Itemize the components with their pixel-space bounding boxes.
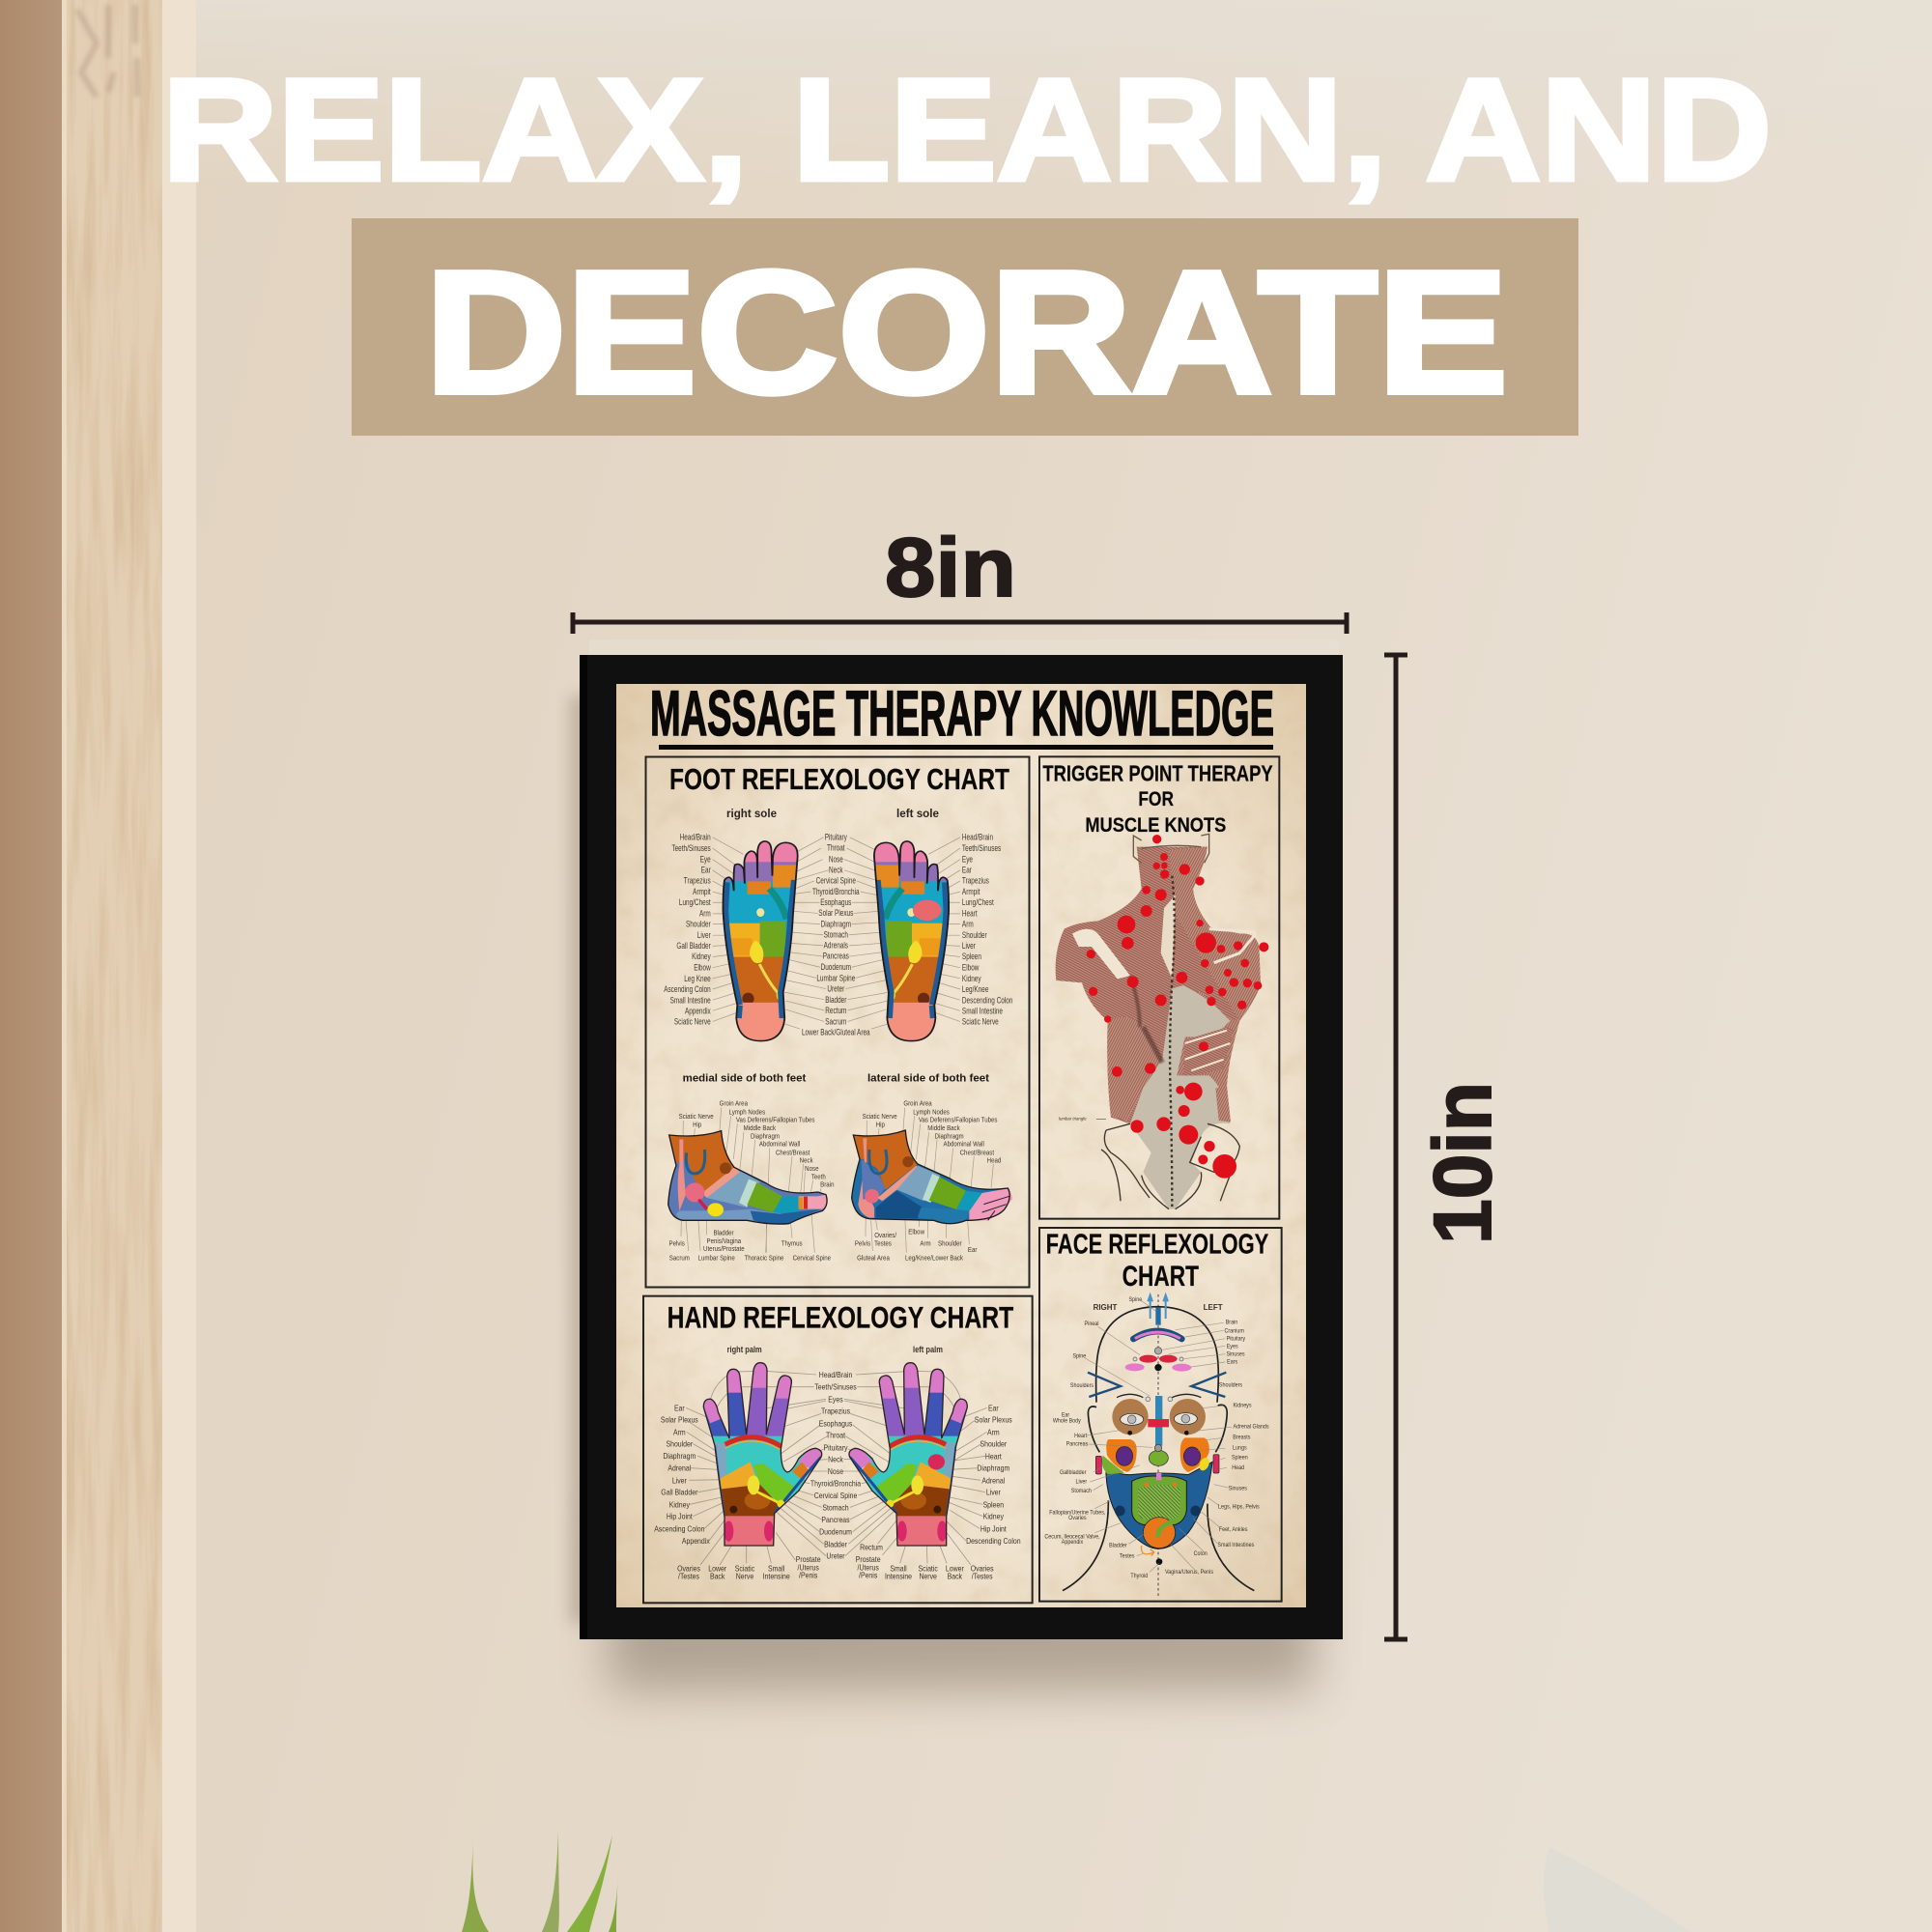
side-foot labels: Thoracic Spine [745,1255,784,1263]
width dimension: 8in: 8in [885,522,1016,614]
hand labels left column: Gall Bladder [661,1488,698,1497]
face labels: Appendix [1062,1540,1083,1546]
right column labels: Arm [962,920,974,929]
left column labels: Ascending Colon [664,984,711,994]
hand labels bottom row: Prostate [796,1554,821,1564]
side-foot labels: Ear [968,1246,978,1254]
hand labels centre column: Bladder [824,1540,847,1549]
face labels: Sinuses [1229,1486,1247,1492]
face labels: Head [1232,1465,1244,1471]
side-foot labels: Lymph Nodes [913,1109,950,1117]
face labels: Lungs [1233,1445,1247,1452]
face labels: Sinuses [1226,1351,1245,1357]
face leader lines [1085,1301,1232,1572]
side-foot labels: Neck [800,1157,813,1165]
side-foot labels: Elbow [908,1229,925,1236]
lateral heading: lateral side of both feet [867,1072,989,1084]
right column labels: Descending Colon [962,995,1012,1006]
panel: foot reflexology [645,757,1030,1287]
side-foot labels: Sacrum [669,1255,690,1263]
hand labels bottom row: /Testes [678,1572,699,1581]
plant leaves [462,1831,618,1932]
hand labels centre column [810,1370,883,1561]
left column labels: Sciatic Nerve [674,1017,711,1027]
centre column labels: Ureter [827,984,845,994]
right palm hand [698,1359,828,1547]
hand labels centre column: Stomach [822,1503,849,1513]
right column labels: Small Intestine [962,1006,1003,1016]
face labels: LEFT [1204,1303,1223,1312]
side-foot labels: Groin Area [720,1100,748,1108]
centre column labels: Rectum [825,1006,846,1015]
side-foot labels: Diaphragm [935,1133,964,1141]
left column labels: Eye [700,854,711,865]
centre column labels [802,833,870,1037]
face labels: Small Intestines [1217,1543,1254,1548]
framed poster [570,639,1343,1639]
poster title: MASSAGE THERAPY KNOWLEDGE [650,677,1274,749]
hand labels centre column: Trapezius [821,1406,850,1416]
left column labels: Arm [699,909,711,919]
hand labels bottom row: Intensine [763,1572,790,1581]
medial heading: medial side of both feet [683,1072,807,1084]
face labels: Shoulders [1070,1383,1094,1389]
side-foot labels: Sciatic Nerve [863,1113,897,1121]
left column labels: Kidney [692,952,711,961]
face labels: Vagina/Uterus, Penis [1165,1570,1213,1576]
side-foot labels: Gluteal Area [857,1255,890,1263]
right sole foot [718,837,802,1044]
side-of-foot diagrams [668,1072,1012,1263]
hand labels bottom row: /Penis [859,1571,877,1580]
side-foot labels: Uterus/Prostate [703,1245,745,1253]
panel: hand reflexology [643,1296,1033,1603]
hand labels bottom row: Sciatic [735,1564,754,1574]
panel: face reflexology [1039,1228,1282,1602]
side-foot labels: Diaphragm [751,1133,780,1141]
face labels: Ovaries [1068,1516,1087,1521]
centre column labels: Pituitary [825,833,847,842]
left column labels: Gall Bladder [676,941,711,951]
wall top light [196,0,1932,184]
hand labels centre column: Ureter [826,1551,845,1561]
hand labels bottom row: /Uterus [798,1563,819,1573]
height dimension: 10in: 10in [1417,1082,1508,1244]
left column labels: Shoulder [686,920,711,929]
hand labels right column: Hip Joint [980,1524,1008,1534]
face labels: Adrenal Glands [1234,1424,1269,1431]
hand labels bottom row: Small [768,1564,785,1574]
face labels: Stomach [1071,1489,1092,1494]
right column labels: Head/Brain [962,833,993,842]
left column labels: Small Intestine [670,995,711,1006]
hand labels left column: Arm [673,1428,686,1437]
poster title [650,677,1274,750]
hand labels bottom row: /Penis [799,1571,817,1580]
face labels: Colon [1194,1551,1208,1557]
face labels: Pineal [1085,1321,1098,1327]
hand labels right column: Ear [988,1404,999,1413]
hand labels centre column: Cervical Spine [814,1491,857,1500]
face labels: Brain [1226,1320,1237,1326]
left palm hand [843,1359,972,1547]
centre column labels: Lower Back/Gluteal Area [802,1027,870,1037]
hand labels centre column: Throat [826,1431,846,1440]
face map illustration [1063,1294,1254,1597]
sole labels: right sole [726,807,777,820]
face labels: Cranium [1225,1328,1244,1334]
side-foot leader lines [681,1108,993,1253]
hand labels bottom row: Back [948,1572,962,1581]
right column labels [962,833,1012,1027]
side-foot labels: Chest/Breast [776,1150,810,1157]
palm headings [727,1345,943,1354]
hand labels bottom row: Nerve [919,1572,937,1581]
trigger point heading: TRIGGER POINT THERAPY [1042,760,1273,785]
sole leader lines [713,838,960,1029]
right column labels: Lung/Chest [962,897,994,907]
right column labels: Spleen [962,952,981,961]
left column labels: Lung/Chest [679,897,711,907]
width dimension: 8in [572,522,1348,634]
hand labels right column: Kidney [983,1512,1004,1521]
right column labels: Sciatic Nerve [962,1017,999,1027]
side-foot labels: Vas Deferens/Fallopian Tubes [919,1117,998,1124]
trigger point heading: MUSCLE KNOTS [1085,813,1226,837]
left column labels [664,833,711,1027]
hand labels right column: Shoulder [980,1439,1008,1449]
face chart heading: CHART [1122,1261,1199,1293]
face labels: Liver [1076,1479,1087,1486]
hand labels right column: Descending Colon [966,1536,1021,1546]
centre column labels: Adrenals [824,941,848,951]
side-foot labels: Pelvis [668,1240,685,1248]
side-foot labels: Nose [805,1165,819,1173]
side-foot labels: Penis/Vagina [706,1237,741,1245]
right column labels: Kidney [962,974,981,983]
centre column labels: Cervical Spine [816,876,856,886]
face labels: Pancreas [1066,1441,1088,1447]
left sole foot [870,837,954,1044]
hand labels centre column: Eyes [828,1395,843,1405]
centre column labels: Esophagus [820,897,851,907]
hand labels centre column: Teeth/Sinuses [814,1382,857,1392]
face labels: Spleen [1232,1455,1248,1462]
side-foot labels: Lumbar Spine [698,1255,735,1263]
centre column labels: Sacrum [825,1017,846,1027]
face labels: Cecum, Ileocecal Valve, [1044,1534,1100,1541]
right column labels: Trapezius [962,876,989,886]
hand labels bottom row: Lower [708,1564,726,1574]
centre column labels: Diaphragm [821,919,851,929]
hand labels left column [654,1404,710,1546]
side-foot labels [668,1100,1001,1263]
centre column labels: Duodenum [821,962,851,972]
side-foot labels: Chest/Breast [960,1150,994,1157]
side-foot labels: Testes [874,1240,892,1248]
hand labels right column [966,1404,1021,1546]
right column labels: Elbow [962,962,980,973]
face labels: Breasts [1233,1435,1250,1441]
side-foot labels: Hip [876,1122,885,1129]
headline: relax learn and: RELAX, LEARN, AND [162,48,1772,211]
hand labels bottom row: Nerve [736,1572,753,1581]
centre column labels: Bladder [825,995,847,1005]
side-foot labels: Ovaries/ [874,1232,896,1239]
face labels: Heart [1074,1434,1088,1439]
face labels: Bladder [1109,1543,1127,1548]
right column labels: Armpit [962,887,980,896]
face labels: Gallbladder [1060,1470,1086,1476]
hand labels bottom row: Sciatic [918,1564,938,1574]
face labels: Eyes [1227,1344,1238,1350]
hand labels bottom row: Lower [946,1564,964,1574]
hand labels centre column: Duodenum [819,1527,852,1537]
face labels [1044,1297,1269,1579]
face labels: Shoulders [1219,1382,1242,1388]
face labels: Legs, Hips, Pelvis [1218,1504,1260,1510]
hand labels left column: Appendix [682,1536,710,1546]
face labels: Ear [1062,1412,1069,1419]
centre column labels: Lumbar Spine [816,973,855,983]
face labels: RIGHT [1094,1303,1118,1312]
sole reflexology diagrams [664,833,1012,1044]
centre column labels: Solar Plexus [818,908,853,918]
trigger point heading [1042,760,1273,837]
face labels: Whole Body [1053,1418,1081,1424]
hand labels left column: Kidney [669,1500,690,1510]
centre column labels: Neck [829,865,843,875]
left column labels: Teeth/Sinuses [671,843,711,853]
hand labels right column: Solar Plexus [975,1415,1012,1425]
hand labels bottom row: Ovaries [677,1564,700,1574]
medial foot [668,1131,827,1224]
hand labels left column: Liver [672,1476,687,1486]
left column labels: Armpit [693,887,711,896]
hand labels left column: Ear [674,1404,685,1413]
back anatomy illustration [1056,834,1261,1209]
centre column labels: Pancreas [823,952,849,961]
side-foot labels: Pelvis [855,1240,871,1248]
centre column labels: Stomach [824,929,848,940]
hand labels centre column: Pituitary [824,1443,848,1453]
side-foot labels: Brain [820,1181,835,1189]
hand labels left column: Adrenal [668,1463,691,1473]
hand labels left column: Shoulder [666,1439,694,1449]
back anatomy illustration: lumbar triangle [1059,1117,1087,1122]
hand labels centre column: Nose [828,1466,843,1476]
sole labels: left sole [896,807,939,820]
left column labels: Elbow [694,962,711,973]
hand labels left column: Diaphragm [663,1451,696,1461]
side-foot labels: Head [987,1157,1001,1165]
side-foot labels: Hip [693,1122,701,1129]
side-foot labels: Bladder [713,1230,734,1237]
hand labels right column: Diaphragm [977,1463,1009,1473]
hand labels bottom row: Small [890,1564,907,1574]
right column labels: Liver [962,941,976,951]
face labels: Testes [1120,1553,1134,1560]
sole labels [726,807,939,820]
right column labels: Eye [962,854,973,865]
right column labels: Heart [962,909,978,919]
hand labels bottom row [677,1554,994,1581]
hand labels right column: Adrenal [981,1476,1005,1486]
side-foot labels: Arm [920,1240,931,1248]
foot chart heading: FOOT REFLEXOLOGY CHART [669,762,1009,796]
side-foot labels: Lymph Nodes [729,1109,766,1117]
hand labels centre column: Neck [828,1455,843,1464]
hand labels bottom row: /Uterus [858,1563,879,1573]
side-foot labels: Cervical Spine [793,1255,831,1263]
face labels: Feet, Ankles [1219,1527,1247,1533]
left column labels: Trapezius [684,876,711,886]
face labels: Ears [1227,1359,1237,1365]
right column labels: Leg/Knee [962,984,988,994]
hand labels centre column: Thyroid/Bronchia [810,1479,862,1489]
hand labels right column: Liver [986,1488,1001,1497]
side-foot labels: Sciatic Nerve [679,1113,714,1121]
red trigger points [1087,835,1268,1179]
hand labels bottom row: Prostate [856,1554,881,1564]
headline banner: DECORATE [425,236,1508,430]
side-foot labels: Leg/Knee/Lower Back [905,1255,963,1263]
centre column labels: Thyroid/Bronchia [812,887,860,896]
face chart heading: FACE REFLEXOLOGY [1046,1230,1268,1261]
hand labels right column: Spleen [983,1500,1004,1510]
hand labels bottom row: Back [710,1572,724,1581]
hand labels centre column: Rectum [860,1543,883,1552]
hand labels left column: Hip Joint [667,1512,694,1521]
left column labels: Liver [697,930,711,940]
side-foot labels: Teeth [811,1174,826,1181]
side-foot labels: Shoulder [938,1240,962,1248]
frame shadow [609,1507,1314,1690]
face labels: Pituitary [1227,1336,1245,1343]
left column labels: Leg Knee [684,974,711,983]
hand leader lines [686,1371,987,1565]
side-foot labels: Abdominal Wall [943,1141,984,1149]
side-foot labels: Middle Back [744,1124,776,1132]
right column labels: Ear [962,865,972,875]
left column labels: Ear [701,865,711,875]
face chart heading [1046,1230,1268,1293]
centre column labels: Nose [829,854,843,865]
right column labels: Shoulder [962,930,987,940]
side-foot labels: Groin Area [903,1100,932,1108]
hand chart heading: HAND REFLEXOLOGY CHART [668,1300,1013,1334]
hand labels left column: Solar Plexus [661,1415,698,1425]
centre column labels: Throat [827,843,845,853]
side-foot labels: Vas Deferens/Fallopian Tubes [736,1117,815,1124]
face labels: Spine [1072,1353,1086,1359]
hand labels left column: Ascending Colon [654,1524,704,1534]
white cushion [1544,1847,1690,1932]
face labels: Kidneys [1233,1403,1252,1408]
face labels: Fallopian/Uterine Tubes, [1049,1510,1106,1517]
side-foot labels: Middle Back [927,1124,960,1132]
hand labels bottom row: Intensine [885,1572,912,1581]
hand labels centre column: Esophagus [819,1419,852,1429]
hand labels right column: Heart [985,1452,1003,1462]
palm headings: left palm [913,1345,943,1354]
hand labels centre column: Head/Brain [819,1370,852,1379]
height dimension: 10in [1384,654,1508,1640]
left column labels: Head/Brain [680,833,711,842]
lateral foot [852,1130,1012,1224]
right column labels: Teeth/Sinuses [962,843,1001,853]
door frame trim [0,0,196,1932]
side-foot labels: Thymus [781,1240,803,1248]
face labels: Spine [1128,1297,1142,1303]
panel: trigger point therapy [1039,756,1279,1219]
hand labels centre column: Pancreas [821,1515,850,1524]
left column labels: Appendix [685,1006,711,1016]
palm headings: right palm [727,1345,762,1354]
face labels: Thyroid [1130,1574,1148,1579]
hand labels bottom row: /Testes [972,1572,993,1581]
trigger point heading: FOR [1138,787,1174,810]
hand labels right column: Arm [987,1428,1000,1437]
side-foot labels: Abdominal Wall [759,1141,801,1149]
hand labels bottom row: Ovaries [971,1564,994,1574]
